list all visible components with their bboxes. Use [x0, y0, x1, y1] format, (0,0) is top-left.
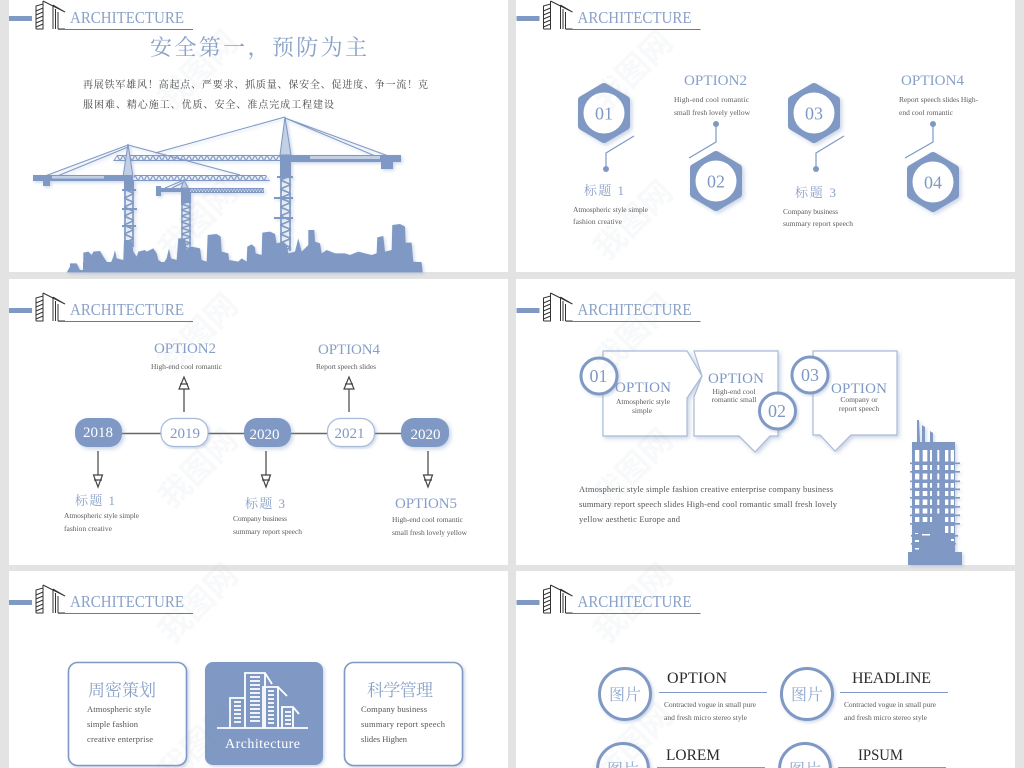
- hexagon 01: [582, 87, 626, 139]
- connector 03: [813, 136, 844, 172]
- watermarks: 我图网: [151, 24, 245, 117]
- item headline: HEADLINE: [852, 670, 931, 687]
- crane: small centre: [156, 180, 264, 251]
- item 3 text: Company business: [783, 207, 838, 216]
- node 2021: [328, 418, 374, 446]
- box 2 text: [708, 371, 764, 404]
- label title 1: 标题 1: [75, 493, 115, 508]
- node 2020: [244, 418, 291, 447]
- box 2 text: High-end cool: [712, 387, 756, 396]
- arrow down 2020: [262, 451, 270, 487]
- card: management: summary report speech: [361, 719, 446, 729]
- item lorem: [657, 747, 765, 768]
- slide 2 background: [516, 0, 1015, 272]
- connector 02: [689, 121, 719, 158]
- item headline: and fresh micro stereo style: [844, 713, 928, 722]
- icon: tower building: [908, 420, 962, 565]
- node 2021: 2021: [334, 426, 364, 442]
- hexagon 04: [911, 156, 955, 208]
- card: planning: 周密策划: [88, 681, 156, 700]
- arrow down 2018: [94, 451, 102, 487]
- slide 2 header: [516, 1, 700, 30]
- picture circle 3: [598, 744, 648, 768]
- card: planning: creative enterprise: [87, 734, 153, 744]
- panel: slide 4 callout boxes: [516, 279, 1015, 565]
- slide 1 title: 安全第一，预防为主: [150, 35, 367, 61]
- box 3 text: OPTION: [831, 381, 887, 397]
- hexagon 03: [792, 87, 836, 139]
- callout box 2: [694, 351, 778, 452]
- card: planning: [68, 662, 186, 766]
- box 1 text: [615, 380, 671, 415]
- timeline axis: [122, 432, 402, 434]
- connector 04: [905, 121, 936, 158]
- label title 3: [233, 496, 302, 536]
- slide 6 background: [516, 571, 1015, 768]
- box 3 text: report speech: [839, 404, 879, 413]
- node 2019: 2019: [170, 426, 200, 442]
- slide 5 header: ARCHITECTURE: [70, 592, 184, 611]
- icon: white city buildings: [217, 673, 308, 728]
- item 4 text: OPTION4: [901, 73, 964, 89]
- slide 2 header: ARCHITECTURE: [578, 8, 692, 27]
- label title 3: summary report speech: [233, 527, 302, 536]
- panel: slide 5 three cards: [9, 571, 508, 768]
- label option 2: [151, 341, 223, 371]
- node 2019: [161, 418, 208, 446]
- watermarks: 我图网: [151, 174, 245, 267]
- box 2 text: OPTION: [708, 371, 764, 387]
- crane: left: [33, 144, 270, 247]
- callout box 3: [813, 351, 897, 451]
- picture circle 2: 图片: [791, 686, 823, 704]
- watermarks: 我图网: [586, 174, 680, 267]
- box 1 text: simple: [632, 406, 653, 415]
- card: planning: Atmospheric style: [87, 704, 151, 714]
- card: planning: simple fashion: [87, 719, 139, 729]
- item lorem: LOREM: [666, 747, 720, 764]
- slide 1 intro text: [83, 78, 428, 111]
- panel: slide 3 timeline: [9, 279, 508, 565]
- item headline: [840, 670, 948, 722]
- picture circle 1: [600, 668, 650, 720]
- panel: slide 6 picture list: [516, 571, 1015, 768]
- item ipsum: IPSUM: [858, 747, 903, 764]
- item 3 text: summary report speech: [783, 219, 853, 228]
- picture circle 1: 图片: [609, 686, 641, 704]
- arrow up 2019: [179, 377, 189, 412]
- label option 5: High-end cool romantic: [392, 515, 464, 524]
- badge 01: [581, 358, 617, 394]
- box 2 text: romantic small: [712, 395, 756, 404]
- item option: Contracted vogue in small pure: [664, 700, 757, 709]
- item ipsum: [838, 747, 946, 768]
- item 2 text: OPTION2: [684, 73, 747, 89]
- label option 5: small fresh lovely yellow: [392, 528, 468, 537]
- hexagon 02: [694, 155, 738, 207]
- item 1 text: fashion creative: [573, 217, 623, 226]
- slide 4 background: [516, 279, 1015, 565]
- label option 4: OPTION4: [318, 342, 380, 358]
- label option 4: Report speech slides: [316, 362, 376, 371]
- illustration: cranes and city skyline: [33, 117, 423, 272]
- item 1 text: 标题 1: [584, 183, 624, 198]
- body paragraph: Atmospheric style simple fashion creative enterprise company business: [579, 484, 833, 494]
- hexagon 02: 02: [707, 172, 725, 192]
- badge 03: [792, 357, 828, 393]
- node 2018: [75, 418, 122, 447]
- card: management: 科学管理: [367, 681, 433, 700]
- slide 1 header: [9, 1, 193, 30]
- crane: large right: [113, 117, 401, 251]
- box 1 text: Atmospheric style: [616, 397, 671, 406]
- body paragraph: [579, 484, 838, 524]
- body paragraph: summary report speech slides High-end cool romantic small fresh lovely: [579, 499, 838, 509]
- watermarks: 我图网: [586, 287, 680, 380]
- card: architecture icon: Architecture: [225, 737, 300, 752]
- card: management: Company business: [361, 704, 427, 714]
- node 2020: 2020: [250, 427, 280, 443]
- badge 01: 01: [590, 366, 608, 386]
- slide 1 background: [9, 0, 508, 272]
- item 3 text: 标题 3: [795, 185, 836, 200]
- item 4 text: end cool romantic: [899, 108, 954, 117]
- picture circle 4: [780, 744, 830, 768]
- watermarks: 我图网: [151, 557, 245, 650]
- slide 4 header: ARCHITECTURE: [578, 300, 692, 319]
- label title 1: fashion creative: [64, 524, 113, 533]
- node 2020 last: 2020: [410, 427, 440, 443]
- item 1 text: [573, 183, 649, 226]
- slide 6 header: ARCHITECTURE: [578, 592, 692, 611]
- box 3 text: Company or: [840, 395, 878, 404]
- watermarks: 我图网: [151, 422, 245, 515]
- item 4 text: [899, 73, 978, 117]
- panel: slide 1 safety first: [9, 0, 508, 272]
- picture circle 2: [782, 668, 832, 720]
- card: management: [344, 662, 462, 766]
- label title 1: Atmospheric style simple: [64, 511, 140, 520]
- body paragraph: yellow aesthetic Europe and: [579, 514, 681, 524]
- label option 2: OPTION2: [154, 341, 216, 357]
- badge 03: 03: [801, 365, 819, 385]
- slide 3 header: ARCHITECTURE: [70, 300, 184, 319]
- slide 5 background: [9, 571, 508, 768]
- callout box 1: [603, 351, 702, 436]
- watermarks: 我图网: [586, 557, 680, 650]
- item 1 text: Atmospheric style simple: [573, 205, 649, 214]
- label option 5: OPTION5: [395, 496, 457, 512]
- item headline: Contracted vogue in small pure: [844, 700, 937, 709]
- node 2018: 2018: [83, 425, 113, 441]
- city skyline: [67, 224, 423, 272]
- item option: [659, 670, 767, 722]
- card: architecture icon: [205, 662, 323, 765]
- item option: and fresh micro stereo style: [664, 713, 748, 722]
- label option 5: [392, 496, 468, 537]
- box 1 text: OPTION: [615, 380, 671, 396]
- hexagon 04: 04: [924, 172, 942, 192]
- watermarks: 我图网: [586, 24, 680, 117]
- arrow up 2021: [344, 377, 354, 412]
- item 2 text: High-end cool romantic: [674, 95, 750, 104]
- item option: OPTION: [667, 670, 727, 687]
- item 2 text: small fresh lovely yellow: [674, 108, 751, 117]
- slide 3 background: [9, 279, 508, 565]
- label title 3: 标题 3: [245, 496, 285, 511]
- slide 1 intro text: 再展铁军雄风！高起点、严要求、抓质量、保安全、促进度、争一流！克: [83, 78, 428, 91]
- slide 5 header: [9, 585, 193, 614]
- slide 6 header: [516, 585, 700, 614]
- badge 02: [760, 393, 796, 429]
- item 3 text: [783, 185, 853, 228]
- node 2020 last: [401, 418, 449, 447]
- watermarks: 我图网: [151, 287, 245, 380]
- label option 2: High-end cool romantic: [151, 362, 223, 371]
- label title 3: Company business: [233, 514, 287, 523]
- hexagon 03: 03: [805, 104, 823, 124]
- arrow down last 2020: [424, 451, 432, 487]
- card: management: slides Highen: [361, 734, 408, 744]
- panel: slide 2 hexagons: [516, 0, 1015, 272]
- slide 4 header: [516, 293, 700, 322]
- hexagon 01: 01: [595, 104, 613, 124]
- badge 02: 02: [768, 401, 786, 421]
- label title 1: [64, 493, 140, 533]
- connector 01: [603, 136, 634, 172]
- box 3 text: [831, 381, 887, 413]
- watermarks: [151, 24, 680, 768]
- watermarks: 我图网: [586, 422, 680, 515]
- slide 3 header: [9, 293, 193, 322]
- slide 1 header: ARCHITECTURE: [70, 8, 184, 27]
- item 4 text: Report speech slides High-: [899, 95, 978, 104]
- item 2 text: [674, 73, 751, 117]
- label option 4: [316, 342, 380, 371]
- slide 1 intro text: 服困难、精心施工、优质、安全、准点完成工程建设: [83, 98, 334, 111]
